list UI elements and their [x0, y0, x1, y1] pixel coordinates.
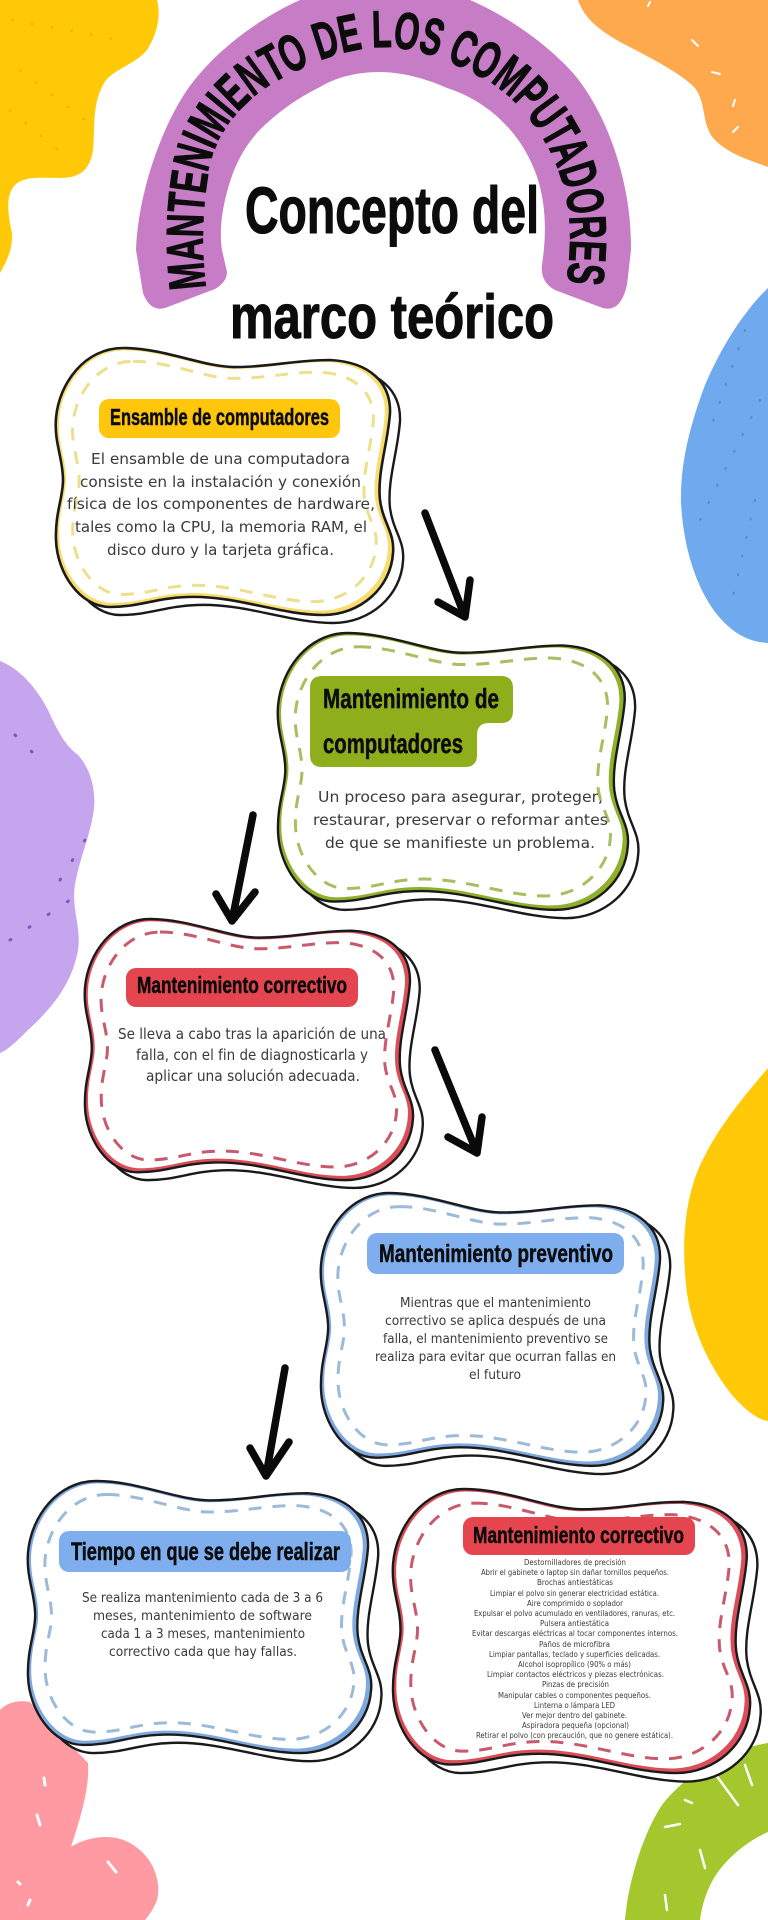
heading text: Mantenimiento correctivo: [473, 1522, 684, 1548]
body text: [67, 450, 375, 559]
tool list: [472, 1557, 678, 1740]
body text: [375, 1295, 616, 1383]
heading pill: [367, 1233, 624, 1274]
tool list: Linterna o lámpara LED: [534, 1701, 615, 1710]
blob: yellow right: [684, 1068, 768, 1421]
heading text: Ensamble de computadores: [110, 404, 329, 430]
heading text: Mantenimiento preventivo: [379, 1240, 613, 1268]
tool list: Aspiradora pequeña (opcional): [522, 1721, 629, 1730]
panel: mantenimiento correctivo: [85, 919, 423, 1188]
arrow: to mantenimiento de computadores: [425, 513, 470, 617]
body text: [82, 1590, 323, 1660]
tool list: Aire comprimido o soplador: [527, 1599, 624, 1608]
tool list: Destornilladores de precisión: [524, 1557, 626, 1567]
heading pill: [310, 676, 513, 767]
body text: física de los componentes de hardware,: [67, 495, 375, 513]
panel: ensamble de computadores: [56, 348, 403, 623]
body text: restaurar, preservar o reformar antes: [313, 811, 608, 829]
tool list: Evitar descargas eléctricas al tocar componentes internos.: [472, 1628, 678, 1638]
heading text: Mantenimiento correctivo: [137, 972, 347, 998]
body text: Se realiza mantenimiento cada de 3 a 6: [82, 1590, 323, 1606]
tool list: Brochas antiestáticas: [537, 1578, 613, 1587]
heading text: computadores: [323, 728, 463, 759]
heading pill: [59, 1531, 351, 1572]
tool list: Pinzas de precisión: [542, 1679, 609, 1689]
body text: correctivo cada que hay fallas.: [109, 1644, 297, 1660]
body text: tales como la CPU, la memoria RAM, el: [75, 518, 367, 536]
panel: tiempo en que se debe realizar: [28, 1481, 381, 1761]
heading pill: [99, 399, 340, 438]
body text: falla, con el fin de diagnosticarla y: [136, 1046, 368, 1064]
body text: [313, 788, 608, 852]
body text: aplicar una solución adecuada.: [146, 1067, 360, 1085]
arrow: to mantenimiento correctivo: [216, 815, 255, 921]
tool list: Paños de microfibra: [539, 1640, 610, 1649]
tool list: Abrir el gabinete o laptop sin dañar tornillos pequeños.: [481, 1568, 669, 1577]
blob: pink bottom left: [0, 1701, 158, 1920]
body text: cada 1 a 3 meses, mantenimiento: [101, 1626, 305, 1642]
heading text: Tiempo en que se debe realizar: [71, 1538, 340, 1566]
body text: consiste en la instalación y conexión: [80, 473, 361, 491]
arrow: to mantenimiento preventivo: [435, 1050, 482, 1153]
tool list: Alcohol isopropílico (90% o más): [518, 1660, 631, 1669]
tool list: Pulsera antiestática: [540, 1619, 609, 1628]
arrow: to tiempo en que se debe realizar: [250, 1368, 289, 1476]
body text: el futuro: [469, 1367, 521, 1383]
tool list: Manipular cables o componentes pequeños.: [498, 1691, 651, 1700]
blob: blue right: [681, 288, 768, 643]
blob: orange top right: [578, 0, 768, 167]
tool list: Limpiar el polvo sin generar electricidad estática.: [490, 1589, 659, 1598]
tool list: Retirar el polvo (con precaución, que no genere estática).: [476, 1730, 673, 1740]
body text: correctivo se aplica después de una: [385, 1313, 606, 1329]
tool list: Expulsar el polvo acumulado en ventiladores, ranuras, etc.: [474, 1609, 675, 1618]
heading: concepto del: Concepto del: [245, 173, 539, 247]
panel: mantenimiento de computadores: [278, 633, 638, 918]
blob: yellow top left: [0, 0, 159, 273]
heading pill: [463, 1517, 695, 1555]
tool list: Ver mejor dentro del gabinete.: [522, 1711, 627, 1720]
tool list: Limpiar contactos eléctricos y piezas electrónicas.: [487, 1669, 664, 1679]
heading: marco teórico: marco teórico: [230, 283, 554, 352]
blob: green bottom right: [625, 1743, 768, 1920]
body text: meses, mantenimiento de software: [93, 1608, 312, 1624]
body text: Un proceso para asegurar, proteger,: [318, 788, 603, 806]
body text: falla, el mantenimiento preventivo se: [383, 1331, 608, 1347]
body text: realiza para evitar que ocurran fallas en: [375, 1349, 616, 1365]
panel: mantenimiento preventivo: [321, 1193, 673, 1474]
title: arched heading: MANTENIMIENTO DE LOS COMPUTADORES: [166, 10, 607, 290]
body text: [118, 1025, 386, 1085]
heading text: Mantenimiento de: [323, 683, 499, 714]
heading pill: [126, 968, 358, 1007]
body text: disco duro y la tarjeta gráfica.: [107, 541, 334, 559]
panel: mantenimiento correctivo herramientas: [393, 1489, 761, 1782]
body text: Mientras que el mantenimiento: [400, 1295, 591, 1311]
blob: purple left: [0, 661, 94, 1053]
body text: de que se manifieste un problema.: [325, 834, 595, 852]
body text: El ensamble de una computadora: [91, 450, 350, 468]
heading text: [323, 683, 499, 759]
body text: Se lleva a cabo tras la aparición de una: [118, 1025, 386, 1043]
tool list: Limpiar pantallas, teclado y superficies delicadas.: [489, 1650, 660, 1659]
title banner: purple arch: [136, 0, 631, 309]
